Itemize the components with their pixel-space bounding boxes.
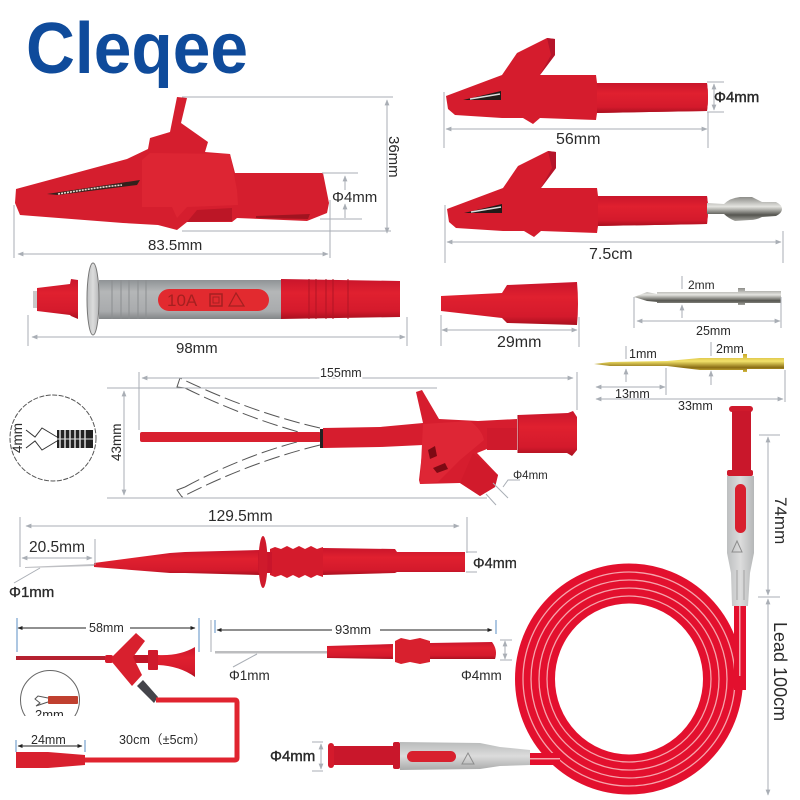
dimension: sleeve 24mm: 24mm	[31, 733, 66, 747]
dimension: length 7.5cm	[445, 205, 783, 263]
dimension: length 83.5mm: 83.5mm	[148, 237, 202, 254]
dimension: length 155mm: 155mm	[320, 366, 362, 380]
dimension: diameter 4mm	[486, 470, 548, 505]
panel: long needle probe 129.5mm	[9, 508, 517, 601]
dimension: diameter 4mm	[707, 82, 759, 112]
dimension: needle diameter 1mm	[9, 568, 54, 601]
dimension: length 155mm	[139, 366, 577, 430]
dimension: height 36mm	[182, 97, 402, 233]
bottom connector	[328, 742, 530, 770]
clip body	[15, 97, 329, 230]
detail circle 2mm	[20, 670, 80, 716]
logo: Cleqee: Cleqee	[26, 9, 248, 89]
panel: alligator clip with banana plug 7.5cm	[445, 151, 783, 263]
silver pin	[634, 288, 781, 305]
panel: silver pin 25mm	[634, 276, 781, 338]
banana sleeve	[16, 752, 85, 768]
clip wedge and handle	[105, 633, 195, 686]
panel: needle probe 93mm	[211, 620, 512, 683]
dimension: diameter 4mm	[461, 640, 512, 683]
dimension: span 43mm: 43mm	[109, 423, 124, 461]
label: lead length: 30cm（±5cm）	[119, 733, 206, 747]
gold pin	[594, 354, 784, 372]
spring coil	[57, 430, 93, 448]
probe body: 10A	[167, 291, 198, 310]
dimension: length 56mm	[444, 92, 708, 148]
dimension: length 25mm	[634, 297, 781, 338]
panel: mini hook clip with lead	[16, 618, 237, 768]
dimension: length 7.5cm: 7.5cm	[589, 246, 633, 263]
dimension: needle 20.5mm	[22, 539, 95, 565]
hook rod	[16, 656, 105, 660]
needle	[25, 564, 94, 568]
cap	[441, 282, 578, 325]
dimension: bottom diameter 4mm	[270, 742, 323, 771]
dimension: tip length 13mm	[596, 368, 666, 401]
dimension: length 83.5mm	[14, 200, 330, 258]
dimension: length 93mm: 93mm	[335, 622, 371, 637]
dimension: length 33mm: 33mm	[678, 399, 713, 413]
dimension: connector 74mm	[758, 435, 790, 597]
panel: shrouded socket 98mm	[28, 263, 407, 357]
dimension: needle diameter 1mm: Φ1mm	[9, 584, 54, 601]
dimension: connector 74mm: 74mm	[771, 497, 790, 544]
red lead	[84, 700, 237, 760]
dimension: tip length 13mm: 13mm	[615, 387, 650, 401]
clip body	[447, 151, 708, 237]
dimension: length 58mm: 58mm	[89, 621, 124, 635]
dimension: diameter 4mm	[320, 173, 377, 219]
panel: large alligator clip 83.5mm	[14, 97, 402, 258]
coil	[523, 572, 746, 786]
hook claws	[26, 428, 57, 450]
dimension: diameter 4mm	[466, 552, 517, 572]
dimension: diameter 4mm: Φ4mm	[332, 189, 377, 206]
dimension: diameter 2mm	[682, 276, 715, 318]
dimension: length 129.5mm: 129.5mm	[208, 508, 273, 525]
top connector	[727, 406, 754, 606]
probe body	[320, 390, 577, 496]
dimension: height 36mm: 36mm	[385, 136, 402, 178]
dimension: shaft 2mm	[711, 342, 744, 385]
dimension: diameter 4mm: Φ4mm	[714, 89, 759, 106]
dimension: length 58mm	[17, 618, 199, 652]
dimension: diameter 4mm: Φ4mm	[461, 668, 502, 683]
dimension: span 43mm	[107, 388, 487, 498]
panel: alligator clip 56mm	[444, 38, 759, 148]
dimension: length 98mm	[28, 315, 407, 357]
dimension: length 25mm: 25mm	[696, 324, 731, 338]
dashed open positions	[177, 378, 320, 497]
dimension: diameter 4mm: Φ4mm	[473, 556, 517, 572]
dimension: length 29mm: 29mm	[497, 334, 541, 351]
probe body	[33, 263, 400, 335]
dimension: diameter 2mm: 2mm	[688, 278, 715, 292]
probe body	[327, 638, 496, 664]
dimension: tip 1mm	[626, 346, 657, 382]
panel: red cap 29mm	[441, 282, 579, 351]
dimension: bottom diameter 4mm: Φ4mm	[270, 748, 315, 765]
panel: gold pin 33mm	[594, 342, 785, 413]
dimension: lead 100cm: Lead 100cm	[770, 622, 790, 721]
hook rod	[140, 432, 321, 442]
detail circle 2mm: 2mm	[35, 707, 64, 722]
dimension: diameter 4mm: Φ4mm	[513, 470, 548, 482]
dimension: length 129.5mm	[20, 508, 467, 567]
panel: flex hook probe 155mm	[107, 366, 577, 505]
detail circle	[10, 395, 96, 481]
dimension: sleeve 24mm	[16, 733, 85, 752]
panel: coiled test lead	[270, 406, 790, 795]
dimension: shaft 2mm: 2mm	[716, 342, 744, 356]
black stub	[137, 680, 158, 703]
dimension: tip 1mm: 1mm	[629, 347, 657, 361]
dimension: length 98mm: 98mm	[176, 340, 218, 357]
dimension: length 93mm	[211, 620, 496, 652]
needle	[215, 651, 327, 654]
label 4mm: 4mm	[10, 423, 25, 453]
probe body	[94, 536, 465, 588]
dimension: length 56mm: 56mm	[556, 131, 600, 148]
dimension: needle diameter 1mm	[229, 654, 270, 683]
banana plug tip	[707, 197, 782, 221]
dimension: needle 20.5mm: 20.5mm	[29, 539, 85, 556]
dimension: needle diameter 1mm: Φ1mm	[229, 668, 270, 683]
clip body	[446, 38, 708, 124]
panel: hook detail circle 4mm	[10, 395, 96, 481]
